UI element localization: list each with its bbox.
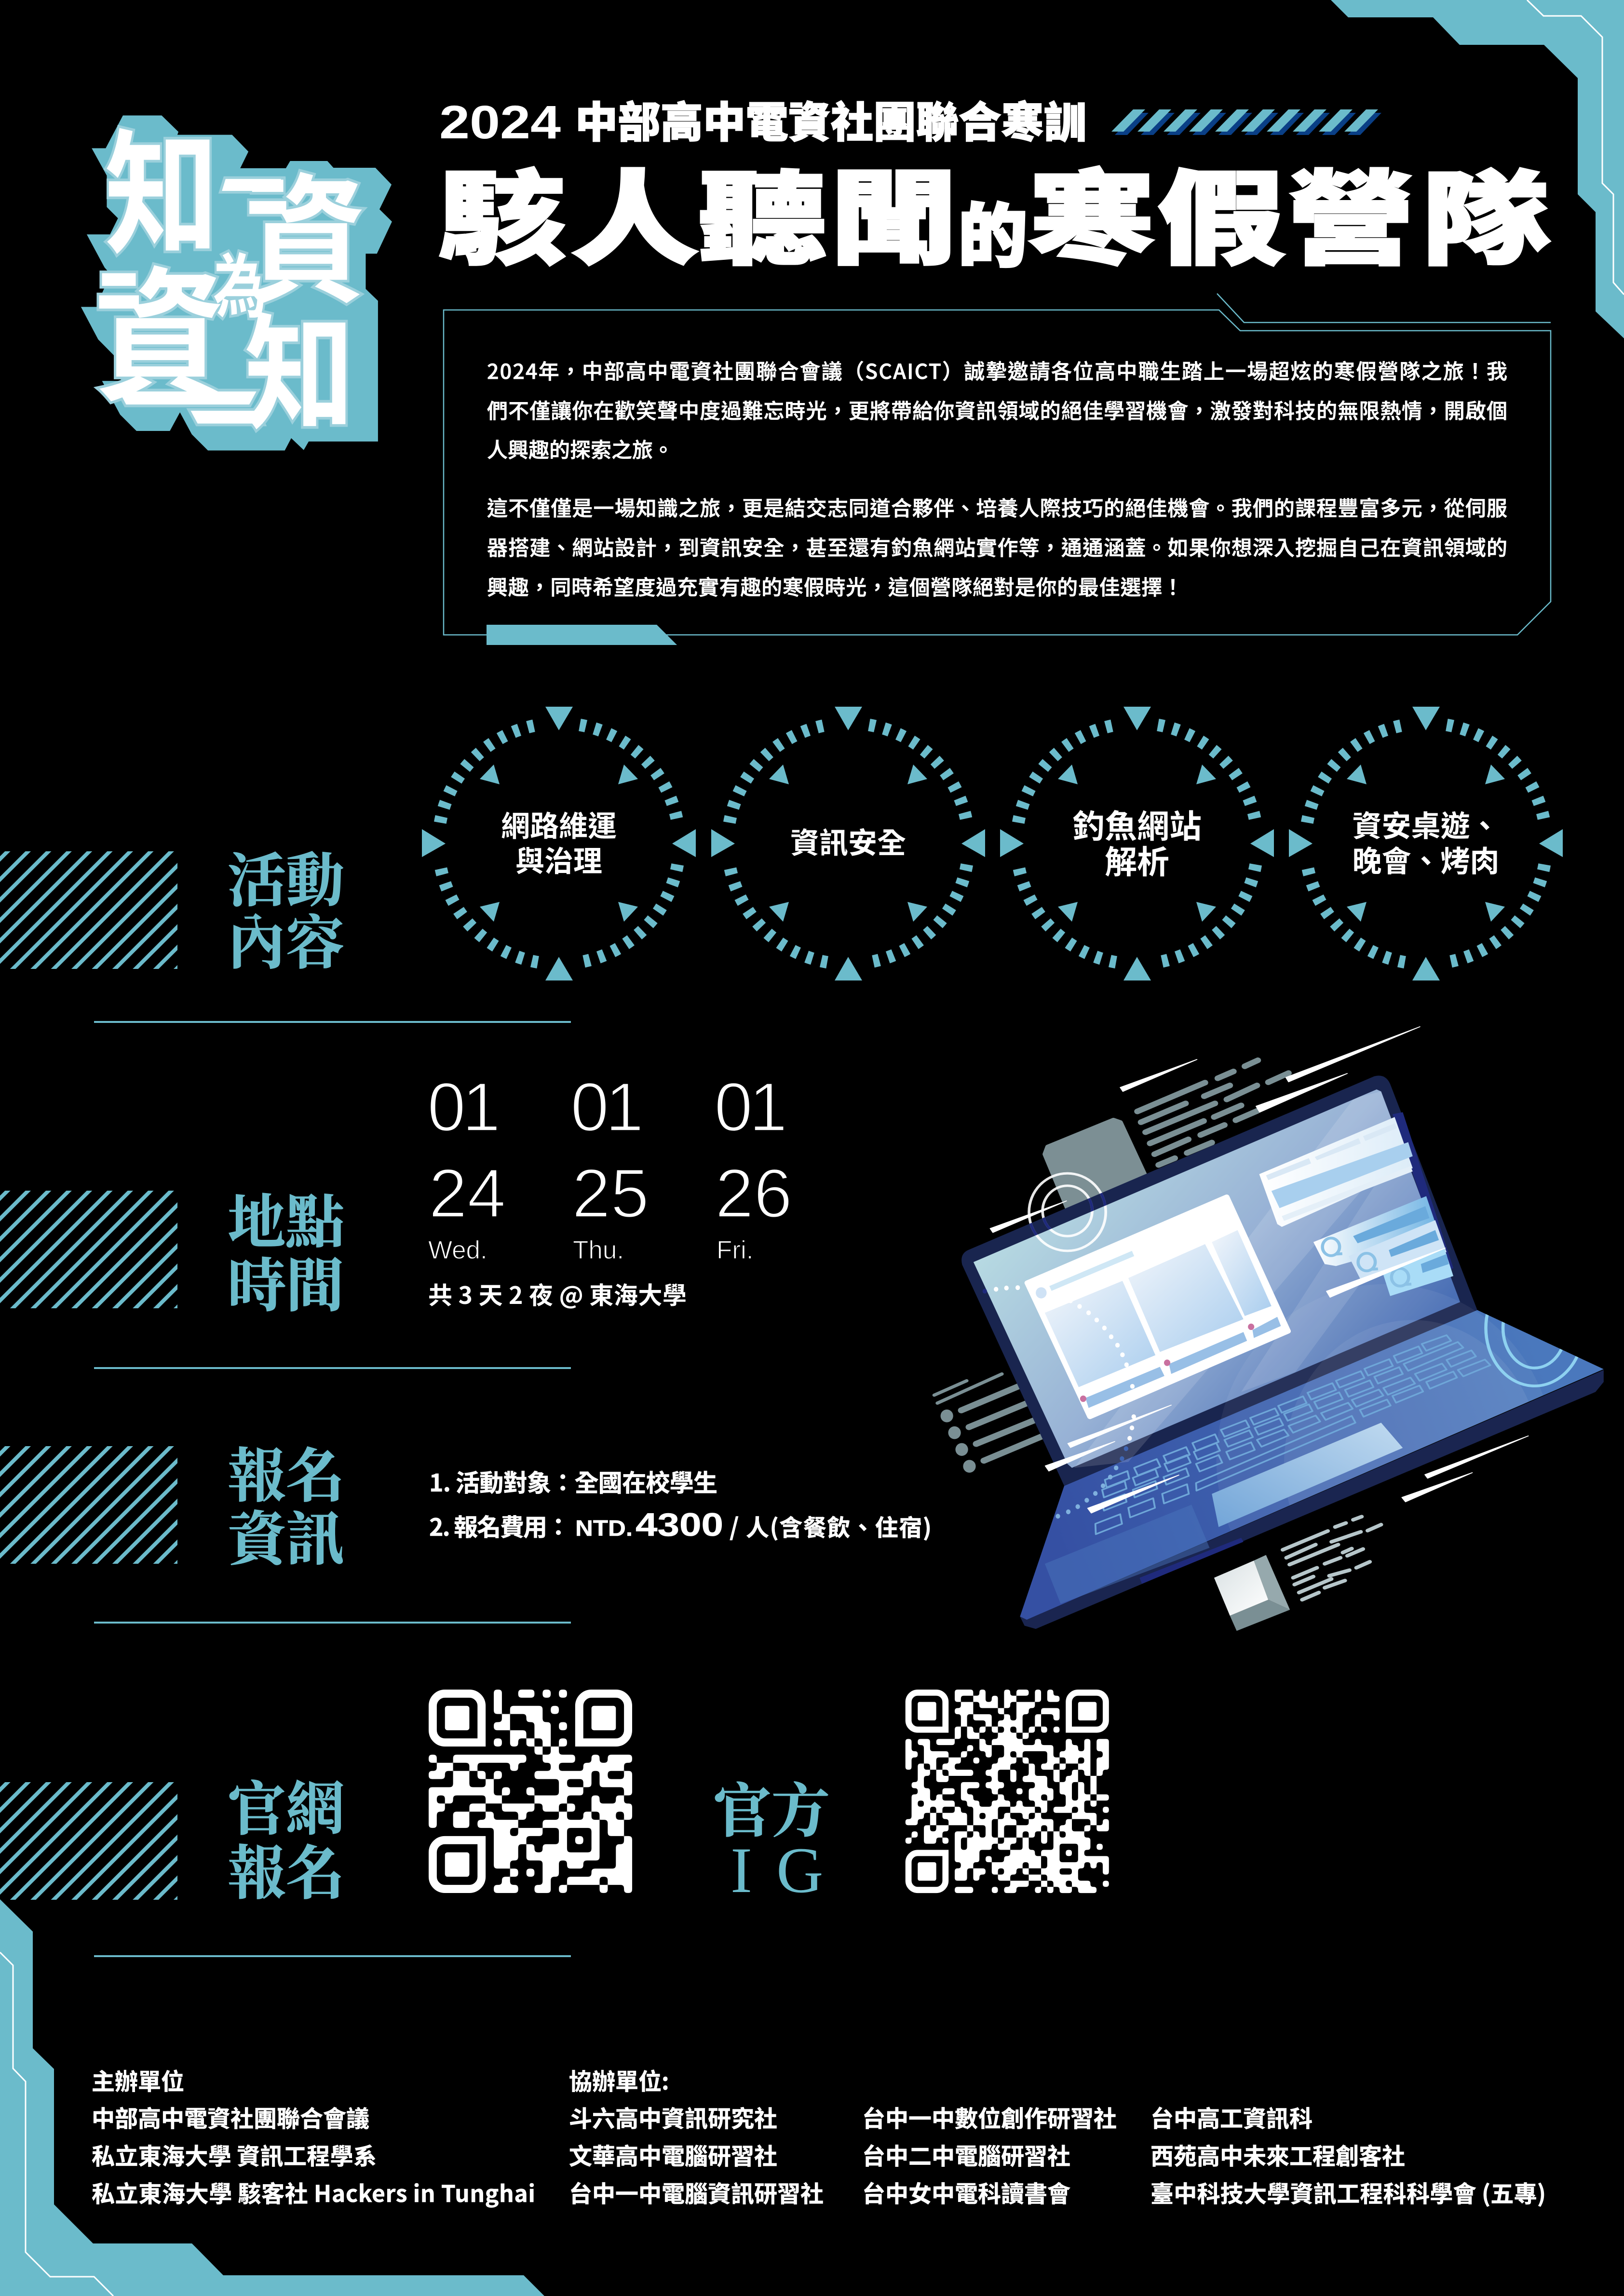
dates [427,1068,792,1264]
co-organizers: 台中一中電腦資訊研習社 [569,2175,824,2209]
gray code lines top [1137,1060,1288,1165]
heading: 官方 IG: IG [731,1835,824,1907]
heading: 活動內容: 活動 [228,834,344,918]
co-organizers: 臺中科技大學資訊工程科科學會 (五專) [1150,2175,1546,2209]
corner frame: top right [1331,0,1624,338]
logo: 知資為資知: 為 [213,231,267,332]
duration and venue: 共 3 天 2 夜 @ 東海大學 [428,1276,687,1311]
activity circle: 釣魚網站解析: 解析 [1105,836,1169,883]
QR code: Instagram [906,1690,1109,1893]
co-organizers: 斗六高中資訊研究社 [569,2100,777,2134]
co-organizers: 台中高工資訊科 [1150,2100,1313,2134]
gray code lines left [934,1374,1045,1473]
heading: 活動內容 [228,834,344,980]
heading: 報名資訊: 資訊 [228,1492,344,1576]
weekdays: Thu. [573,1236,624,1264]
palm rest strip [1139,1538,1244,1584]
touchpad [1212,1423,1403,1527]
co-organizers: 文華高中電腦研習社 [569,2137,777,2171]
logo: 知資為資知: 資 [94,222,225,430]
subtitle stripes [1111,109,1381,135]
activity circle: 資訊安全 [711,707,985,980]
logo: 知資為資知: 資 [244,130,366,331]
date month row: 01 [570,1068,641,1146]
section: schedule hatch [0,1191,177,1308]
main title: 駭人聽聞 [438,137,958,285]
co-organizers: 台中女中電科讀書會 [862,2175,1070,2209]
logo: 知資為資知: 知 [105,86,219,281]
activity circle: 資安桌遊、晚會、烤肉: 資安桌遊、 [1352,802,1500,845]
registration info: 1. 活動對象：全國在校學生 [429,1464,717,1499]
rings on gray card [1029,1173,1106,1251]
gray card with rings [1045,1120,1144,1208]
logo: 知資為資知: 知 [244,273,354,455]
co-organizers: 台中二中電腦研習社 [862,2137,1070,2171]
main title: 寒假營隊 [1028,137,1550,285]
activity circle: 釣魚網站解析 [1000,707,1274,980]
weekdays: Fri. [717,1236,754,1264]
top right panel [1259,1117,1413,1227]
heading: 官網報名: 官網 [228,1762,344,1846]
activity circle: 釣魚網站解析: 釣魚網站 [1072,801,1202,847]
organizers: 中部高中電資社團聯合會議 [92,2100,369,2134]
heading: 活動內容: 內容 [228,896,344,980]
registration info: 4300 [636,1506,723,1543]
section: activities hatch [0,851,177,969]
activity circle: 網路維運與治理: 網路維運 [501,803,617,845]
screen bezel accent [1393,1112,1453,1272]
heading: 官網報名: 報名 [228,1826,344,1910]
intro paragraph 1: 們不僅讓你在歡笑聲中度過難忘時光，更將帶給你資訊領域的絕佳學習機會，激發對科技的無限熱情，開啟個 [487,395,1507,425]
intro paragraph 1: 2024年，中部高中電資社團聯合會議（SCAICT）誠摯邀請各位高中職生踏上一場超炫的寒假營隊之旅！我 [487,355,1507,385]
registration info: 人(含餐飲、住宿) [746,1509,932,1543]
browser window [1027,1197,1288,1417]
intro paragraph 2: 這不僅僅是一場知識之旅，更是結交志同道合夥伴、培養人際技巧的絕佳機會。我們的課程豐富多元，從伺服 [487,492,1507,522]
registration info: NTD. [575,1516,633,1541]
date month row [427,1068,785,1146]
illustration: laptop [934,1027,1604,1636]
main title [438,137,1550,285]
co-organizers [569,2063,1546,2209]
gray code lines bottom [1283,1517,1381,1600]
date day row: 24 [429,1155,506,1232]
weekdays [428,1236,754,1264]
intro paragraph 2: 興趣，同時希望度過充實有趣的寒假時光，這個營隊絕對是你的最佳選擇！ [487,571,1183,601]
intro paragraph 2 [487,492,1507,601]
registration info: 2. 報名費用： [429,1508,570,1543]
QR code: official site [429,1690,632,1893]
deck rings [1484,1314,1579,1387]
comet streaks [990,1027,1528,1513]
co-organizers: 西苑高中未來工程創客社 [1150,2137,1405,2171]
organizers: 私立東海大學 資訊工程學系 [92,2137,377,2171]
heading: 官方 IG [713,1764,830,1907]
registration info [429,1464,932,1543]
palm rest [1045,1504,1210,1604]
panel: introduction [444,294,1551,645]
activity circle: 網路維運與治理 [422,707,696,980]
logo: 知資為資知: 資 [244,130,366,331]
date month row: 01 [714,1068,785,1146]
date month row: 01 [427,1068,498,1146]
date day row: 25 [572,1155,649,1232]
keycap [1214,1555,1290,1631]
heading: 報名資訊 [228,1429,344,1576]
main title: 的 [959,181,1027,280]
date day row: 26 [715,1155,792,1232]
co-organizers: 台中一中數位創作研習社 [862,2100,1117,2134]
intro paragraph 2: 器搭建、網站設計，到資訊安全，甚至還有釣魚網站實作等，通通涵蓋。如果你想深入挖掘自己在資訊領域的 [487,532,1507,562]
section: registration hatch [0,1446,177,1564]
intro paragraph 1: 人興趣的探索之旅。 [487,434,674,464]
keyboard keys [1096,1335,1490,1534]
laptop body side [1020,1370,1604,1629]
screen display [974,1089,1460,1468]
keyboard deck [1020,1310,1604,1620]
section: sign-up hatch [0,1782,177,1900]
heading: 地點時間: 地點 [228,1176,344,1260]
corner frame: bottom left [0,1899,544,2296]
date day row [429,1155,792,1232]
subtitle: 中部高中電資社團聯合寒訓 [575,89,1086,150]
heading: 報名資訊: 報名 [228,1429,344,1513]
organizers [92,2063,535,2209]
logo: 知資為資知 [81,86,392,455]
registration info: / [730,1508,739,1543]
organizers: 主辦單位 [92,2063,184,2096]
logo: 知資為資知: 知 [244,273,354,455]
activity circle: 資安桌遊、晚會、烤肉: 晚會、烤肉 [1352,837,1500,880]
heading: 官方 IG: 官方 [713,1764,830,1848]
activity circle: 資安桌遊、晚會、烤肉 [1289,707,1563,980]
logo: 知資為資知: 資 [94,222,225,430]
subtitle: 2024 [439,96,561,148]
heading: 地點時間: 時間 [228,1239,344,1323]
organizers: 私立東海大學 駭客社 Hackers in Tunghai [92,2175,535,2209]
logo: 知資為資知: 為 [213,231,267,332]
heading: 官網報名 [228,1762,344,1910]
intro paragraph 1 [487,355,1507,464]
activity circle: 資訊安全: 資訊安全 [790,820,906,862]
activity circle: 網路維運與治理: 與治理 [515,838,602,880]
weekdays: Wed. [428,1236,487,1264]
screen bezel [961,1075,1477,1486]
heading: 地點時間 [228,1176,344,1323]
logo: 知資為資知: 知 [105,86,219,281]
screen sheen [1074,1091,1555,1636]
search cards [1313,1196,1453,1296]
dotted line [983,1285,1136,1518]
co-organizers: 協辦單位: [569,2063,669,2096]
